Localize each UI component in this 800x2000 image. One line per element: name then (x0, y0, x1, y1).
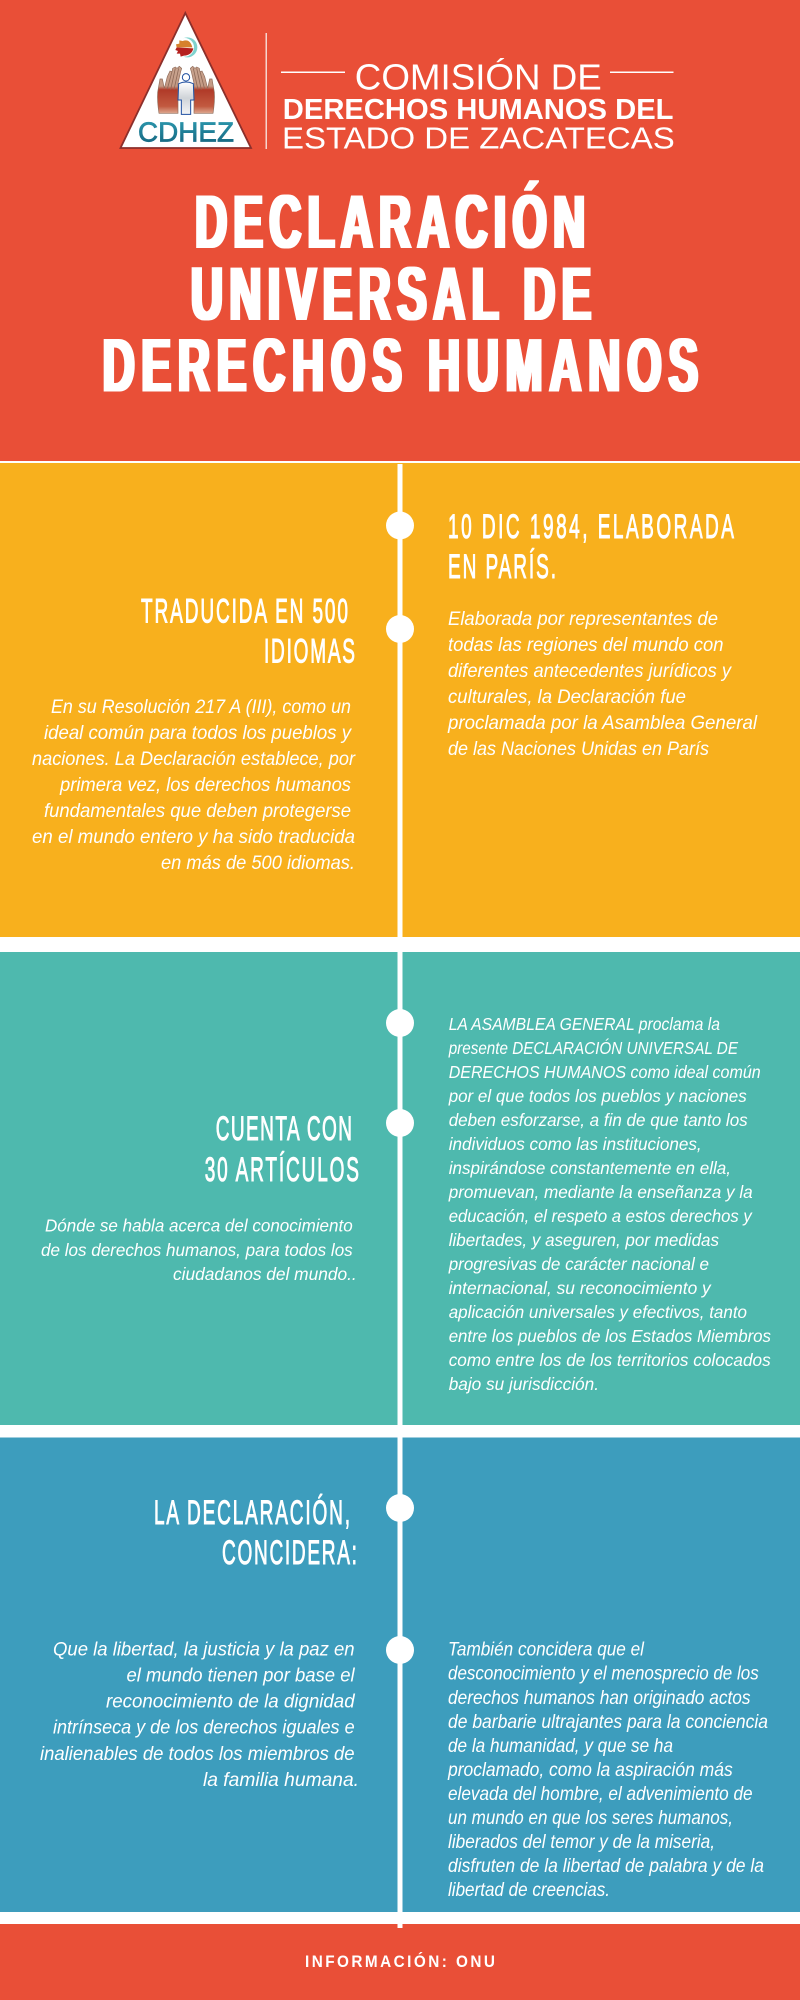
text block: desconocimiento y menosprecio: liberados del temor y de la miseria, (448, 1832, 715, 1853)
text block: elaborada por representantes: diferentes antecedentes jurídicos y (448, 661, 732, 682)
text block: resolución 217 A: fundamentales que deben protegerse (44, 801, 351, 822)
heading: 10 dic 1984: 10 DIC 1984, ELABORADA (448, 507, 734, 545)
text block: la libertad, la justicia y la paz: inalienables de todos los miembros de (40, 1744, 355, 1765)
text block: la libertad, la justicia y la paz: intrínseca y de los derechos iguales e (53, 1718, 355, 1739)
title: DECLARACIÓN (195, 179, 585, 265)
panel: artículos y proclamación (verde azulado) (0, 952, 800, 1425)
text block: desconocimiento y menosprecio: desconocimiento y el menosprecio de los (448, 1664, 759, 1685)
logo: CDHEZ triangle emblem (120, 13, 251, 148)
text block: la asamblea general proclama: promuevan, mediante la enseñanza y la (448, 1182, 753, 1202)
text block: la asamblea general proclama: internacional, su reconocimiento y (449, 1278, 712, 1298)
text block: desconocimiento y menosprecio (447, 1640, 768, 1901)
text block: la asamblea general proclama: aplicación universales y efectivos, tanto (449, 1302, 747, 1322)
title (103, 179, 698, 409)
text block: la libertad, la justicia y la paz: reconocimiento de la dignidad (106, 1692, 356, 1713)
text block: desconocimiento y menosprecio: disfruten de la libertad de palabra y de la (448, 1856, 764, 1877)
text block: conocimiento de los derechos (41, 1216, 357, 1284)
logo text: organization name: COMISIÓN DE (355, 56, 602, 97)
text block: conocimiento de los derechos: de los derechos humanos, para todos los (41, 1240, 353, 1260)
text block: la asamblea general proclama: entre los pueblos de los Estados Miembros (449, 1326, 771, 1346)
text block: conocimiento de los derechos: ciudadanos del mundo.. (173, 1264, 357, 1284)
heading: traducida en 500 idiomas: IDIOMAS (264, 632, 355, 670)
heading: la declaración concidera (154, 1493, 357, 1571)
text block: la asamblea general proclama: libertades, y aseguren, por medidas (449, 1230, 719, 1250)
heading: cuenta con 30 artículos (205, 1109, 359, 1188)
text block: la libertad, la justicia y la paz: la familia humana. (203, 1770, 359, 1791)
text block: resolución 217 A: en más de 500 idiomas. (161, 853, 355, 874)
text block: desconocimiento y menosprecio: de barbarie ultrajantes para la conciencia (448, 1712, 768, 1733)
heading: cuenta con 30 artículos: 30 ARTÍCULOS (205, 1150, 359, 1188)
text block: desconocimiento y menosprecio: derechos humanos han originado actos (448, 1688, 751, 1709)
text block: elaborada por representantes: todas las regiones del mundo con (448, 635, 724, 656)
text block: elaborada por representantes: de las Naciones Unidas en París (448, 739, 709, 760)
logo text: organization name: ESTADO DE ZACATECAS (282, 121, 675, 155)
text block: desconocimiento y menosprecio: También concidera que el (448, 1640, 645, 1661)
text block: la asamblea general proclama: por el que todos los pueblos y naciones (448, 1086, 747, 1106)
timeline: central line and dots (386, 464, 414, 1928)
heading: cuenta con 30 artículos: CUENTA CON (216, 1109, 352, 1147)
heading: 10 dic 1984 (448, 507, 734, 585)
text block: elaborada por representantes: Elaborada por representantes de (448, 609, 718, 630)
text block: desconocimiento y menosprecio: un mundo en que los seres humanos, (448, 1808, 733, 1829)
text block: resolución 217 A: naciones. La Declaración establece, por (32, 749, 356, 770)
text block: la asamblea general proclama: DERECHOS HUMANOS como ideal común (449, 1062, 761, 1082)
text block: conocimiento de los derechos: Dónde se habla acerca del conocimiento (45, 1216, 353, 1236)
panel: header (0, 0, 800, 461)
logo divider (266, 33, 267, 149)
text block: la asamblea general proclama: progresivas de carácter nacional e (448, 1254, 709, 1274)
text block: la asamblea general proclama: presente DECLARACIÓN UNIVERSAL DE (448, 1038, 738, 1058)
text block: la libertad, la justicia y la paz (40, 1640, 359, 1791)
text block: la asamblea general proclama: bajo su jurisdicción. (449, 1374, 599, 1394)
logo text: organization name (281, 56, 675, 155)
heading: la declaración concidera: CONCIDERA: (222, 1533, 357, 1571)
text block: resolución 217 A (32, 697, 356, 874)
text block: la libertad, la justicia y la paz: Que la libertad, la justicia y la paz en (53, 1640, 355, 1661)
text block: resolución 217 A: ideal común para todos los pueblos y (44, 723, 352, 744)
heading: traducida en 500 idiomas (141, 592, 355, 670)
text block: la asamblea general proclama: deben esforzarse, a fin de que tanto los (449, 1110, 748, 1130)
title: UNIVERSAL DE (191, 253, 591, 337)
panel: footer (0, 1924, 800, 2000)
text block: desconocimiento y menosprecio: elevada del hombre, el advenimiento de (448, 1784, 753, 1805)
text block: resolución 217 A: En su Resolución 217 A (III), como un (51, 697, 351, 718)
source note: INFORMACIÓN: ONU (305, 1951, 495, 1971)
logo: CDHEZ triangle emblem: CDHEZ (138, 117, 234, 148)
text block: desconocimiento y menosprecio: libertad de creencias. (448, 1880, 610, 1901)
text block: elaborada por representantes (447, 609, 758, 760)
text block: elaborada por representantes: proclamada por la Asamblea General (447, 713, 758, 734)
text block: desconocimiento y menosprecio: proclamado, como la aspiración más (447, 1760, 733, 1781)
text block: la libertad, la justicia y la paz: el mundo tienen por base el (126, 1666, 355, 1687)
text block: la asamblea general proclama: individuos como las instituciones, (449, 1134, 702, 1154)
panel: traducción y elaboración (amarillo) (0, 463, 800, 937)
heading: la declaración concidera: LA DECLARACIÓN, (154, 1493, 350, 1531)
heading: 10 dic 1984: EN PARÍS. (448, 547, 556, 585)
text block: la asamblea general proclama: LA ASAMBLEA GENERAL proclama la (449, 1014, 720, 1034)
text block: la asamblea general proclama: como entre los de los territorios colocados (449, 1350, 771, 1370)
title: DERECHOS HUMANOS (103, 324, 698, 409)
text block: resolución 217 A: primera vez, los derechos humanos (59, 775, 351, 796)
panel: la declaración considera (azul) (0, 1438, 800, 1912)
text block: la asamblea general proclama: educación, el respeto a estos derechos y (449, 1206, 753, 1226)
text block: la asamblea general proclama: inspirándose constantemente en ella, (449, 1158, 731, 1178)
heading: traducida en 500 idiomas: TRADUCIDA EN 500 (141, 592, 348, 630)
text block: elaborada por representantes: culturales, la Declaración fue (448, 687, 686, 708)
text block: desconocimiento y menosprecio: de la humanidad, y que se ha (448, 1736, 673, 1757)
logo text: organization name: DERECHOS HUMANOS DEL (283, 94, 674, 126)
text block: resolución 217 A: en el mundo entero y ha sido traducida (32, 827, 355, 848)
text block: la asamblea general proclama (448, 1014, 771, 1394)
